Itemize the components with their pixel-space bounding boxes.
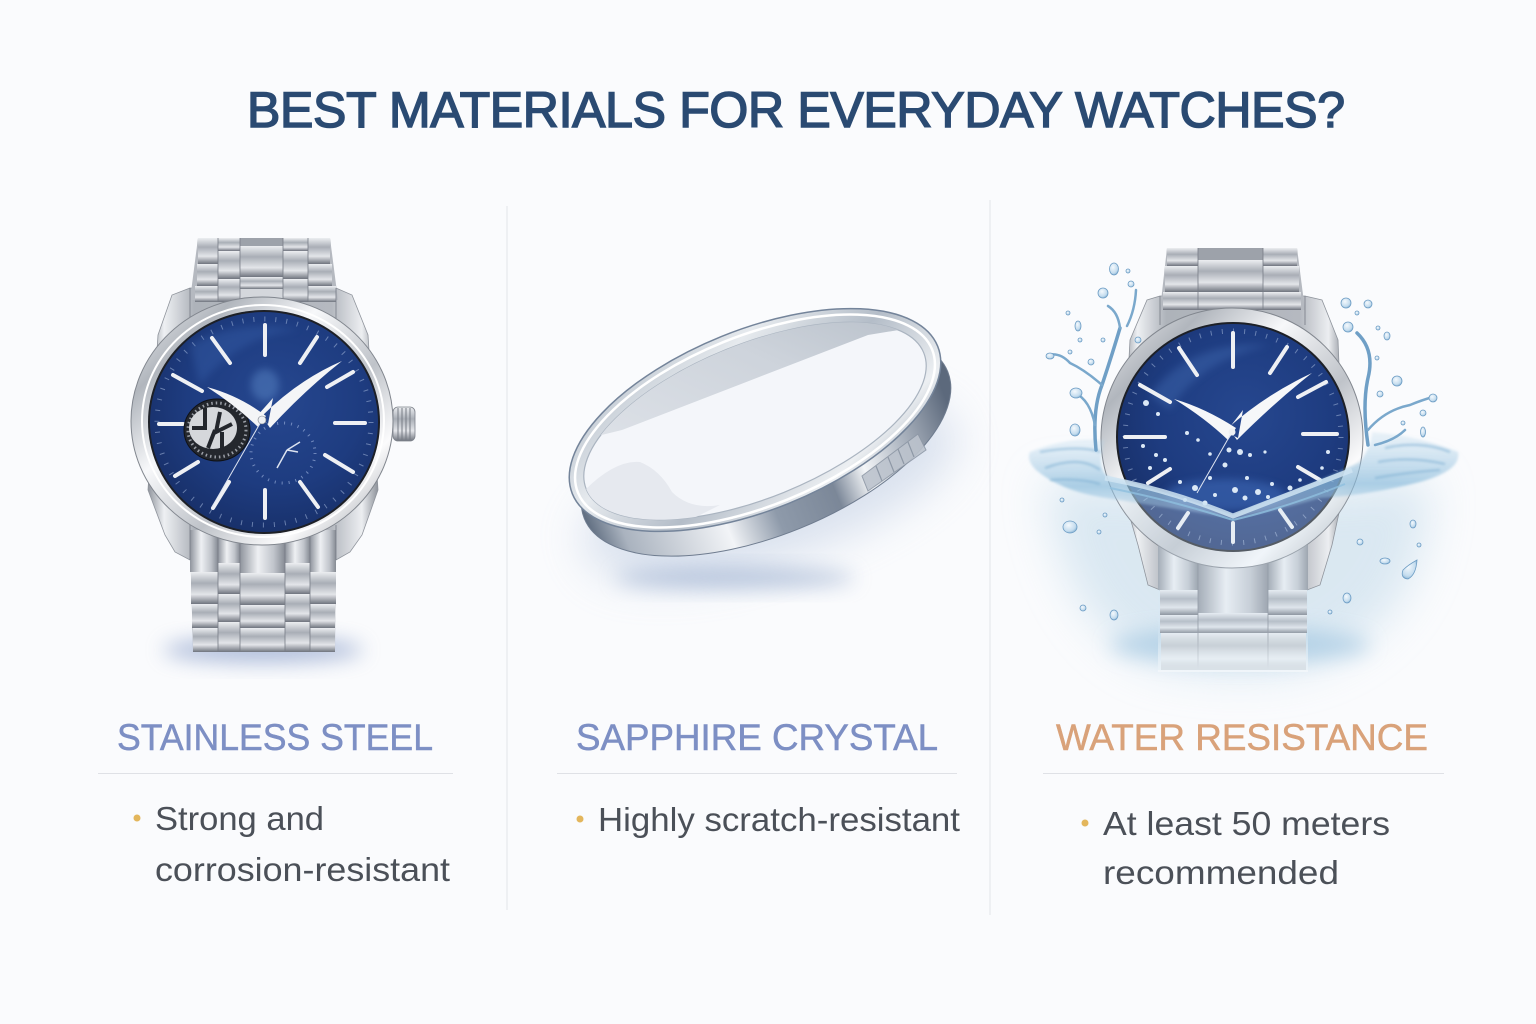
crystal side band [551, 288, 981, 602]
heading rule [557, 772, 957, 774]
illustration: watch in water splash [1029, 248, 1458, 674]
heading: stainless steel: STAINLESS STEEL [117, 717, 433, 758]
upper bracelet [1160, 248, 1305, 310]
bullet: strong and corrosion-resistant: Strong and [155, 800, 324, 837]
water line over dial [1105, 470, 1352, 516]
heading rule [98, 772, 453, 774]
heading: sapphire crystal: SAPPHIRE CRYSTAL [576, 717, 938, 758]
column divider: left [506, 206, 508, 910]
panel: water resistance [1029, 248, 1458, 891]
illustration: stainless steel watch [131, 238, 415, 663]
bullet: at least 50 meters recommended: recommended [1103, 854, 1339, 891]
panel: stainless steel [98, 238, 453, 888]
water droplets [1046, 263, 1437, 620]
underwater tint [1106, 466, 1360, 660]
crystal top ring [539, 263, 971, 577]
lower bracelet [1158, 545, 1308, 672]
illustration: sapphire crystal disc [568, 308, 965, 602]
splash streams [1095, 328, 1120, 450]
crystal edge engraving [862, 434, 926, 491]
water body [1045, 480, 1430, 674]
watch body [1101, 248, 1363, 672]
water ripples [1040, 445, 1450, 484]
bullet: strong and corrosion-resistant: corrosion-resistant [155, 851, 450, 888]
title: BEST MATERIALS FOR EVERYDAY WATCHES? [247, 82, 1345, 138]
bullet: at least 50 meters recommended: At least 50 meters [1103, 805, 1390, 842]
bullet: highly scratch-resistant: Highly scratch-resistant [598, 801, 960, 838]
water surface right [1233, 432, 1458, 518]
bullet: at least 50 meters recommended [1082, 805, 1390, 891]
heading: water resistance: WATER RESISTANCE [1056, 717, 1428, 758]
column divider: right [989, 200, 991, 915]
bullet: strong and corrosion-resistant [134, 800, 450, 888]
heading rule [1043, 772, 1444, 774]
panel: sapphire crystal [557, 308, 965, 838]
water surface left [1029, 439, 1233, 518]
